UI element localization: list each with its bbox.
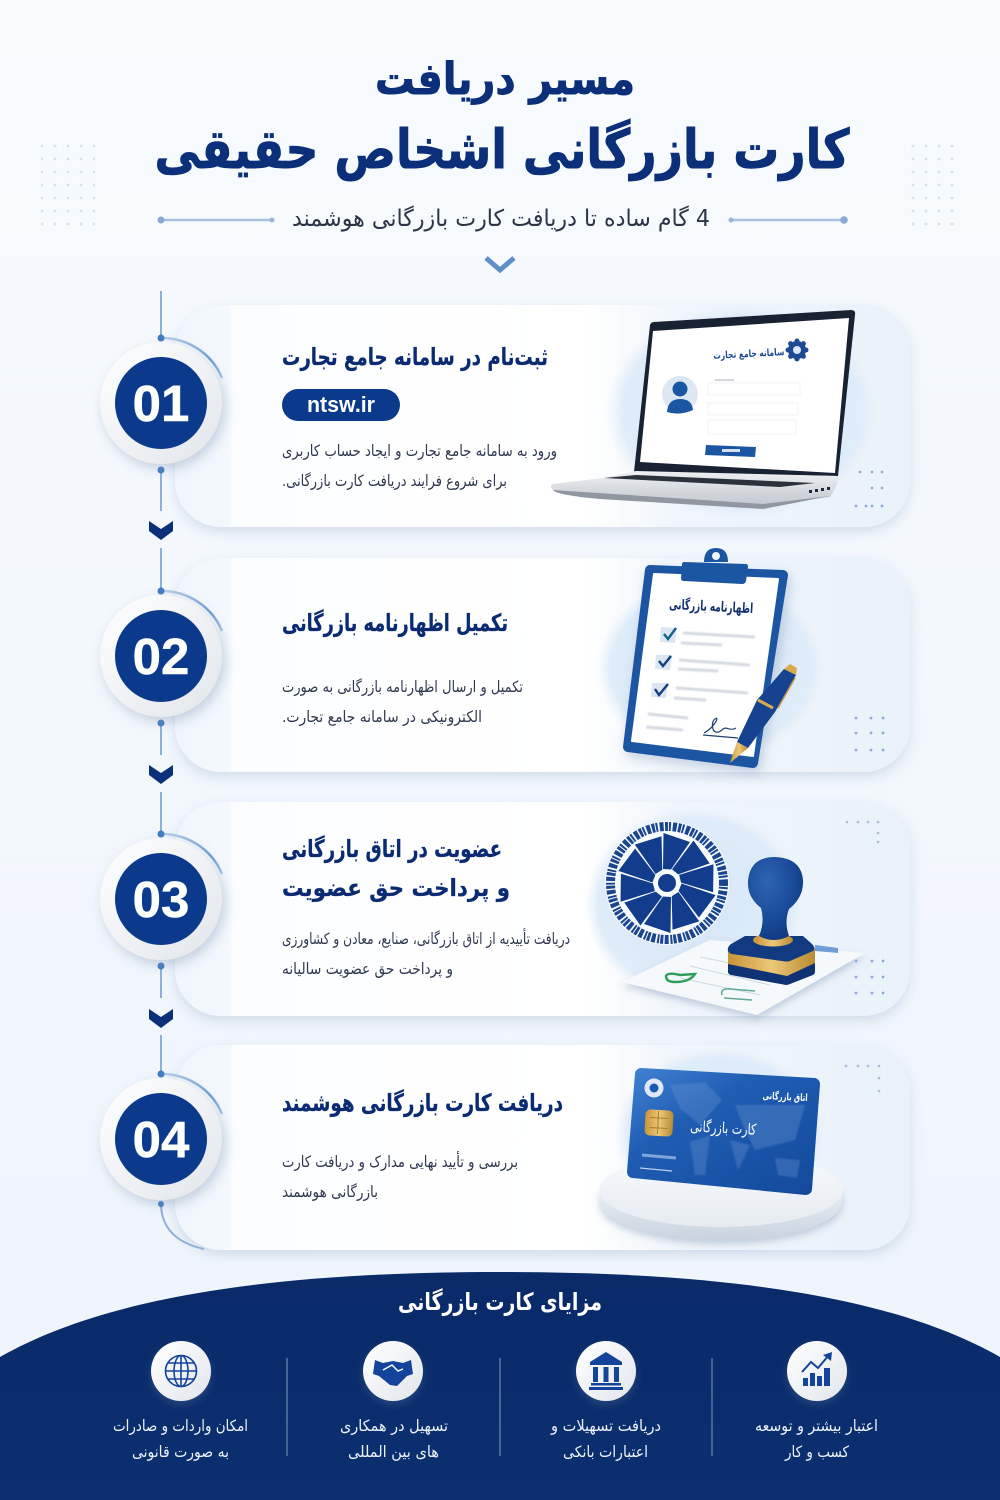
footer heading: مزایای کارت بازرگانی (398, 1288, 602, 1316)
badge 04 (100, 1078, 222, 1200)
badge 03: 03 (133, 871, 189, 928)
arrow: header chevron (486, 258, 514, 270)
panel: step 3 (175, 802, 910, 1016)
dividers (287, 1358, 712, 1456)
description (282, 678, 523, 727)
badge 01 (100, 342, 222, 464)
illustration: card on platform: کارت بازرگانی (690, 1117, 757, 1139)
decorative dots (855, 471, 883, 507)
benefit text: cooperation: های بین المللی (348, 1443, 439, 1461)
benefit text: bank facilities (550, 1417, 661, 1461)
description (282, 1151, 518, 1201)
illustration: card on platform (599, 1047, 843, 1240)
illustration: clipboard (597, 548, 825, 763)
badge 02 (100, 595, 222, 717)
url pill (282, 389, 400, 421)
decorative dots right (905, 140, 959, 226)
title: کارت بازرگانی اشخاص حقیقی (154, 118, 850, 182)
decorative dots (855, 717, 884, 751)
arrow: chevron 3 (149, 1009, 173, 1028)
panel: step 2 (175, 548, 910, 772)
icon: globe (151, 1341, 211, 1401)
benefit text: bank facilities: دریافت تسهیلات و (550, 1417, 661, 1436)
heading: دریافت کارت بازرگانی هوشمند (282, 1089, 563, 1117)
benefit text: credit and growth: کسب و کار (784, 1443, 850, 1462)
icon: bank (576, 1341, 636, 1401)
decorative dots (846, 821, 879, 843)
description: تکمیل و ارسال اظهارنامه بازرگانی به صورت (282, 678, 523, 697)
badge 03 (100, 838, 222, 960)
benefit text: bank facilities: اعتبارات بانکی (563, 1443, 648, 1461)
benefit text: cooperation: تسهیل در همکاری (340, 1417, 448, 1436)
description: بررسی و تأیید نهایی مدارک و دریافت کارت (282, 1151, 518, 1172)
arrow: chevron 1 (149, 521, 173, 540)
description: ورود به سامانه جامع تجارت و ایجاد حساب کاربری (282, 442, 557, 461)
description (282, 442, 557, 491)
description: دریافت تأییدیه از اتاق بازرگانی، صنایع، معادن و کشاورزی (282, 928, 570, 949)
illustration: laptop: سامانه جامع تجارت (713, 347, 785, 362)
panel: step 1 (175, 304, 910, 527)
decorative dots (855, 960, 884, 994)
heading: تکمیل اظهارنامه بازرگانی (282, 609, 508, 637)
illustration: stamp on paper (622, 857, 865, 1015)
illustration: chamber emblem (585, 807, 805, 1003)
benefit text: cooperation (340, 1417, 448, 1461)
panel: benefits footer (0, 1272, 1000, 1500)
description: برای شروع فرایند دریافت کارت بازرگانی. (282, 472, 507, 491)
badge 01: 01 (133, 375, 189, 432)
icon: growth chart (787, 1341, 847, 1401)
benefit text: imports and exports: امکان واردات و صادرات (113, 1417, 248, 1436)
benefit text: credit and growth (755, 1417, 878, 1462)
benefit text: imports and exports: به صورت قانونی (132, 1443, 229, 1461)
url pill: ntsw.ir (307, 392, 375, 417)
benefit text: credit and growth: اعتبار بیشتر و توسعه (755, 1417, 878, 1436)
illustration: laptop (551, 304, 878, 520)
description: و پرداخت حق عضویت سالیانه (282, 960, 453, 979)
description (282, 928, 570, 979)
icon: handshake (363, 1341, 423, 1401)
subtitle with side rules: 4 گام ساده تا دریافت کارت بازرگانی هوشمند (292, 205, 710, 232)
illustration: card on platform: اتاق بازرگانی (762, 1089, 808, 1104)
badge 02: 02 (133, 628, 189, 685)
arrow: chevron 2 (149, 765, 173, 784)
illustration: clipboard: اظهارنامه بازرگانی (669, 596, 754, 617)
subtitle with side rules (158, 205, 848, 232)
timeline with numbered badges (100, 291, 222, 1249)
title: مسیر دریافت (375, 54, 635, 105)
decorative dots left (41, 140, 95, 226)
decorative dots (845, 1065, 880, 1092)
description: بازرگانی هوشمند (282, 1183, 378, 1201)
title (154, 54, 850, 182)
description: الکترونیکی در سامانه جامع تجارت. (282, 708, 482, 727)
panel: step 4 (175, 1045, 910, 1250)
heading (282, 835, 510, 902)
heading: و پرداخت حق عضویت (282, 874, 510, 902)
heading: ثبت‌نام در سامانه جامع تجارت (282, 343, 548, 371)
heading: عضویت در اتاق بازرگانی (282, 835, 502, 863)
badge 04: 04 (133, 1111, 190, 1168)
benefit text: imports and exports (113, 1417, 248, 1461)
